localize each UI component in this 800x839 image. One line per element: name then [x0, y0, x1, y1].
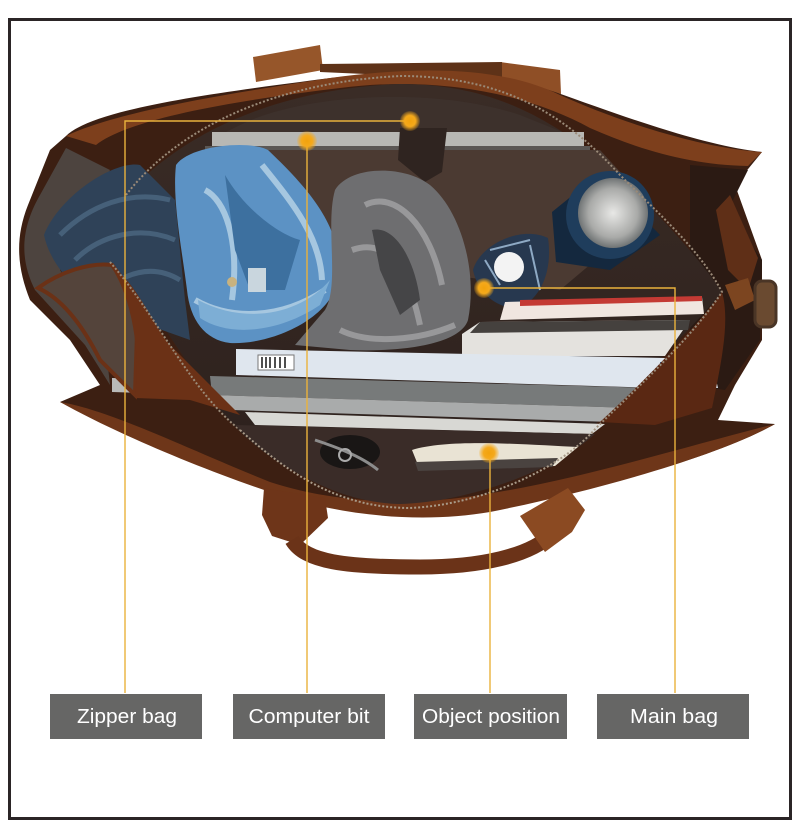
stacked notebooks: [462, 296, 704, 356]
rim bottom: [60, 402, 775, 518]
line: object position: [489, 453, 491, 693]
interior opening: [110, 84, 722, 500]
patterned pouch: [473, 234, 549, 308]
laptop strap: [398, 128, 447, 182]
outer bag shell: [19, 72, 775, 514]
rim top: [66, 70, 762, 166]
bag illustration: [19, 45, 776, 567]
back pocket: [220, 97, 570, 135]
line: zipper bag: [125, 121, 410, 693]
line: computer bit: [306, 141, 308, 693]
top handle tabs: [253, 45, 561, 94]
zipper left: [110, 76, 400, 430]
pocket notebook: [412, 443, 578, 471]
zipper right: [400, 76, 722, 428]
right side panel: [690, 165, 762, 390]
large books: [112, 349, 718, 434]
dot: object position: [479, 443, 499, 463]
label: Object position: Object position: [422, 706, 560, 728]
right leather flap: [600, 292, 725, 425]
laptop edge: [205, 132, 590, 151]
label: Computer bit: [233, 694, 385, 739]
label: Object position: [414, 694, 567, 739]
dot: main bag: [474, 278, 494, 298]
label: Computer bit: Computer bit: [248, 706, 370, 728]
blue jeans roll: [175, 145, 339, 343]
bottom handle: [262, 488, 585, 567]
grey sweater roll: [295, 171, 471, 350]
front pocket: [235, 425, 595, 504]
left flap: [38, 264, 138, 395]
side buckle: [725, 278, 776, 327]
left side shadow panel: [24, 148, 110, 385]
label: Zipper bag: Zipper bag: [77, 706, 177, 728]
dot: zipper bag: [400, 111, 420, 131]
right side leather highlight: [716, 195, 758, 290]
dot: computer bit: [297, 131, 317, 151]
callout lines: [125, 121, 675, 693]
back compartment: [210, 150, 655, 290]
dark jeans roll: [44, 165, 190, 340]
label: Zipper bag: [50, 694, 202, 739]
line: main bag: [484, 288, 675, 693]
left leather flap: [112, 268, 240, 415]
metal flask: [552, 171, 660, 270]
label: Main bag: [597, 694, 749, 739]
keys: [315, 435, 380, 470]
callout dots: [297, 111, 499, 463]
label: Main bag: Main bag: [630, 706, 718, 728]
zipper bottom: [240, 428, 596, 508]
